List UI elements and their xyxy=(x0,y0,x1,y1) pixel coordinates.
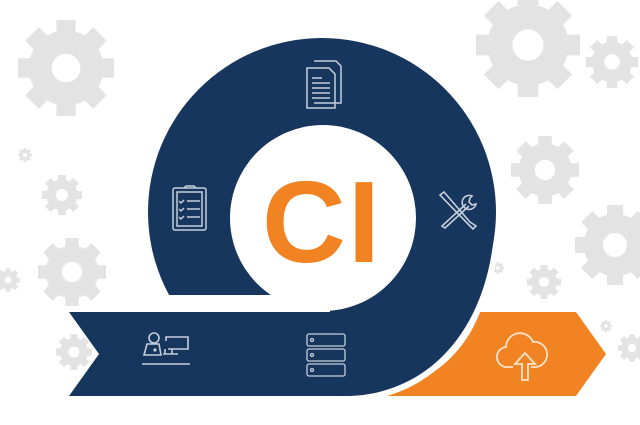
navy CI loop xyxy=(69,38,496,396)
orange deploy arrow xyxy=(360,312,606,396)
icon: documents xyxy=(307,61,341,108)
title: CI: CI xyxy=(262,157,382,287)
icon: server stack xyxy=(307,334,345,376)
icon: tools xyxy=(440,192,476,229)
icon: clipboard checklist xyxy=(173,186,206,230)
icon: developer at computer xyxy=(142,333,190,364)
icon: cloud upload xyxy=(497,333,547,380)
